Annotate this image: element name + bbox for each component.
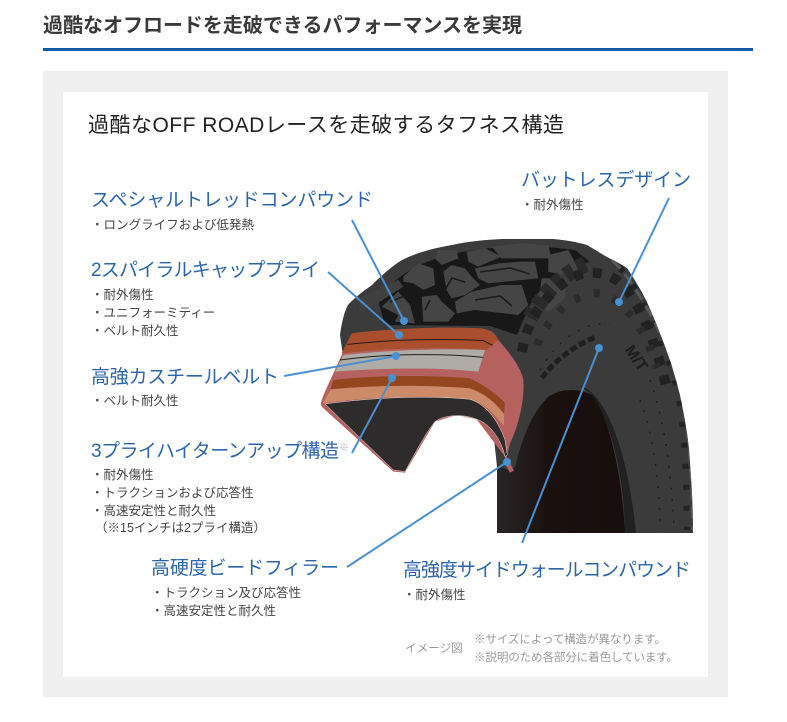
sidewall logo mark xyxy=(542,337,596,378)
label: 3 ply high turn-up xyxy=(91,440,349,535)
label: special tread compound: スペシャルトレッドコンパウンド xyxy=(91,190,373,211)
sidewall shoulder ring xyxy=(522,260,693,530)
panel: grey frame xyxy=(43,71,728,697)
label: 3 ply high turn-up: ・高速安定性と耐久性 xyxy=(91,503,216,518)
section base xyxy=(321,328,524,473)
wheel opening xyxy=(497,390,625,533)
label: high strength sidewall compound: 高強度サイドウォールコンパウンド xyxy=(403,559,691,581)
peach layer xyxy=(323,386,504,426)
label: buttressless design: バットレスデザイン xyxy=(521,169,691,191)
label: 2 spiral cap ply xyxy=(91,259,320,338)
footnotes xyxy=(474,632,678,664)
label: special tread compound: ・ロングライフおよび低発熱 xyxy=(91,218,254,232)
footnotes: ※サイズによって構造が異なります。 xyxy=(474,632,666,646)
label: high hardness bead filler: ・高速安定性と耐久性 xyxy=(151,603,276,618)
label: high hardness bead filler: 高硬度ビードフィラー xyxy=(151,557,339,579)
label: buttressless design: ・耐外傷性 xyxy=(521,197,584,212)
label: high strength sidewall compound xyxy=(403,559,691,602)
label: 2 spiral cap ply: ・ベルト耐久性 xyxy=(91,324,179,338)
tread dark grooves xyxy=(378,247,590,335)
rim band xyxy=(580,386,636,533)
tread compound layer xyxy=(342,328,498,353)
panel: white content xyxy=(63,92,708,677)
label: 2 spiral cap ply: ・耐外傷性 xyxy=(91,287,154,302)
sidewall speckle xyxy=(540,324,674,530)
label: high strength steel belt xyxy=(91,366,279,408)
label: 2 spiral cap ply: ・ユニフォーミティー xyxy=(91,306,215,320)
label: high strength sidewall compound: ・耐外傷性 xyxy=(403,587,466,602)
tread blocks xyxy=(358,243,578,323)
ply band xyxy=(331,376,505,414)
tire body xyxy=(340,239,693,533)
label: 3 ply high turn-up: ・耐外傷性 xyxy=(91,467,154,482)
steel belt xyxy=(335,349,485,372)
footnotes: ※説明のため各部分に着色しています。 xyxy=(474,650,678,664)
label: special tread compound xyxy=(91,190,373,232)
leader lines xyxy=(284,198,669,567)
image note: イメージ図 xyxy=(405,642,463,655)
tire illustration xyxy=(321,239,693,533)
sidewall lettering: M/T xyxy=(621,342,651,375)
label: 3 ply high turn-up: 3プライハイターンアップ構造 xyxy=(91,440,339,462)
panel heading: 過酷なOFF ROADレースを走破するタフネス構造 xyxy=(88,114,564,137)
label: 3 ply high turn-up: ・トラクションおよび応答性 xyxy=(91,485,254,500)
outer edge lugs xyxy=(620,268,687,530)
label: 3 ply high turn-up: （※15インチは2プライ構造） xyxy=(95,521,266,535)
label: high strength steel belt: ・ベルト耐久性 xyxy=(91,394,179,408)
label: buttressless design xyxy=(521,169,691,212)
page title: 過酷なオフロードを走破できるパフォーマンスを実現 xyxy=(43,14,522,37)
label: 2 spiral cap ply: 2スパイラルキャッププライ xyxy=(91,259,320,281)
label: high strength steel belt: 高強カスチールベルト xyxy=(91,366,279,388)
tread groove accents xyxy=(390,268,530,310)
leader dots xyxy=(388,298,623,466)
label: 3 ply high turn-up: ※ xyxy=(339,443,349,454)
inner liner xyxy=(325,397,507,472)
cross-section xyxy=(321,328,524,473)
label: high hardness bead filler: ・トラクション及び応答性 xyxy=(151,585,301,600)
label: high hardness bead filler xyxy=(151,557,339,618)
